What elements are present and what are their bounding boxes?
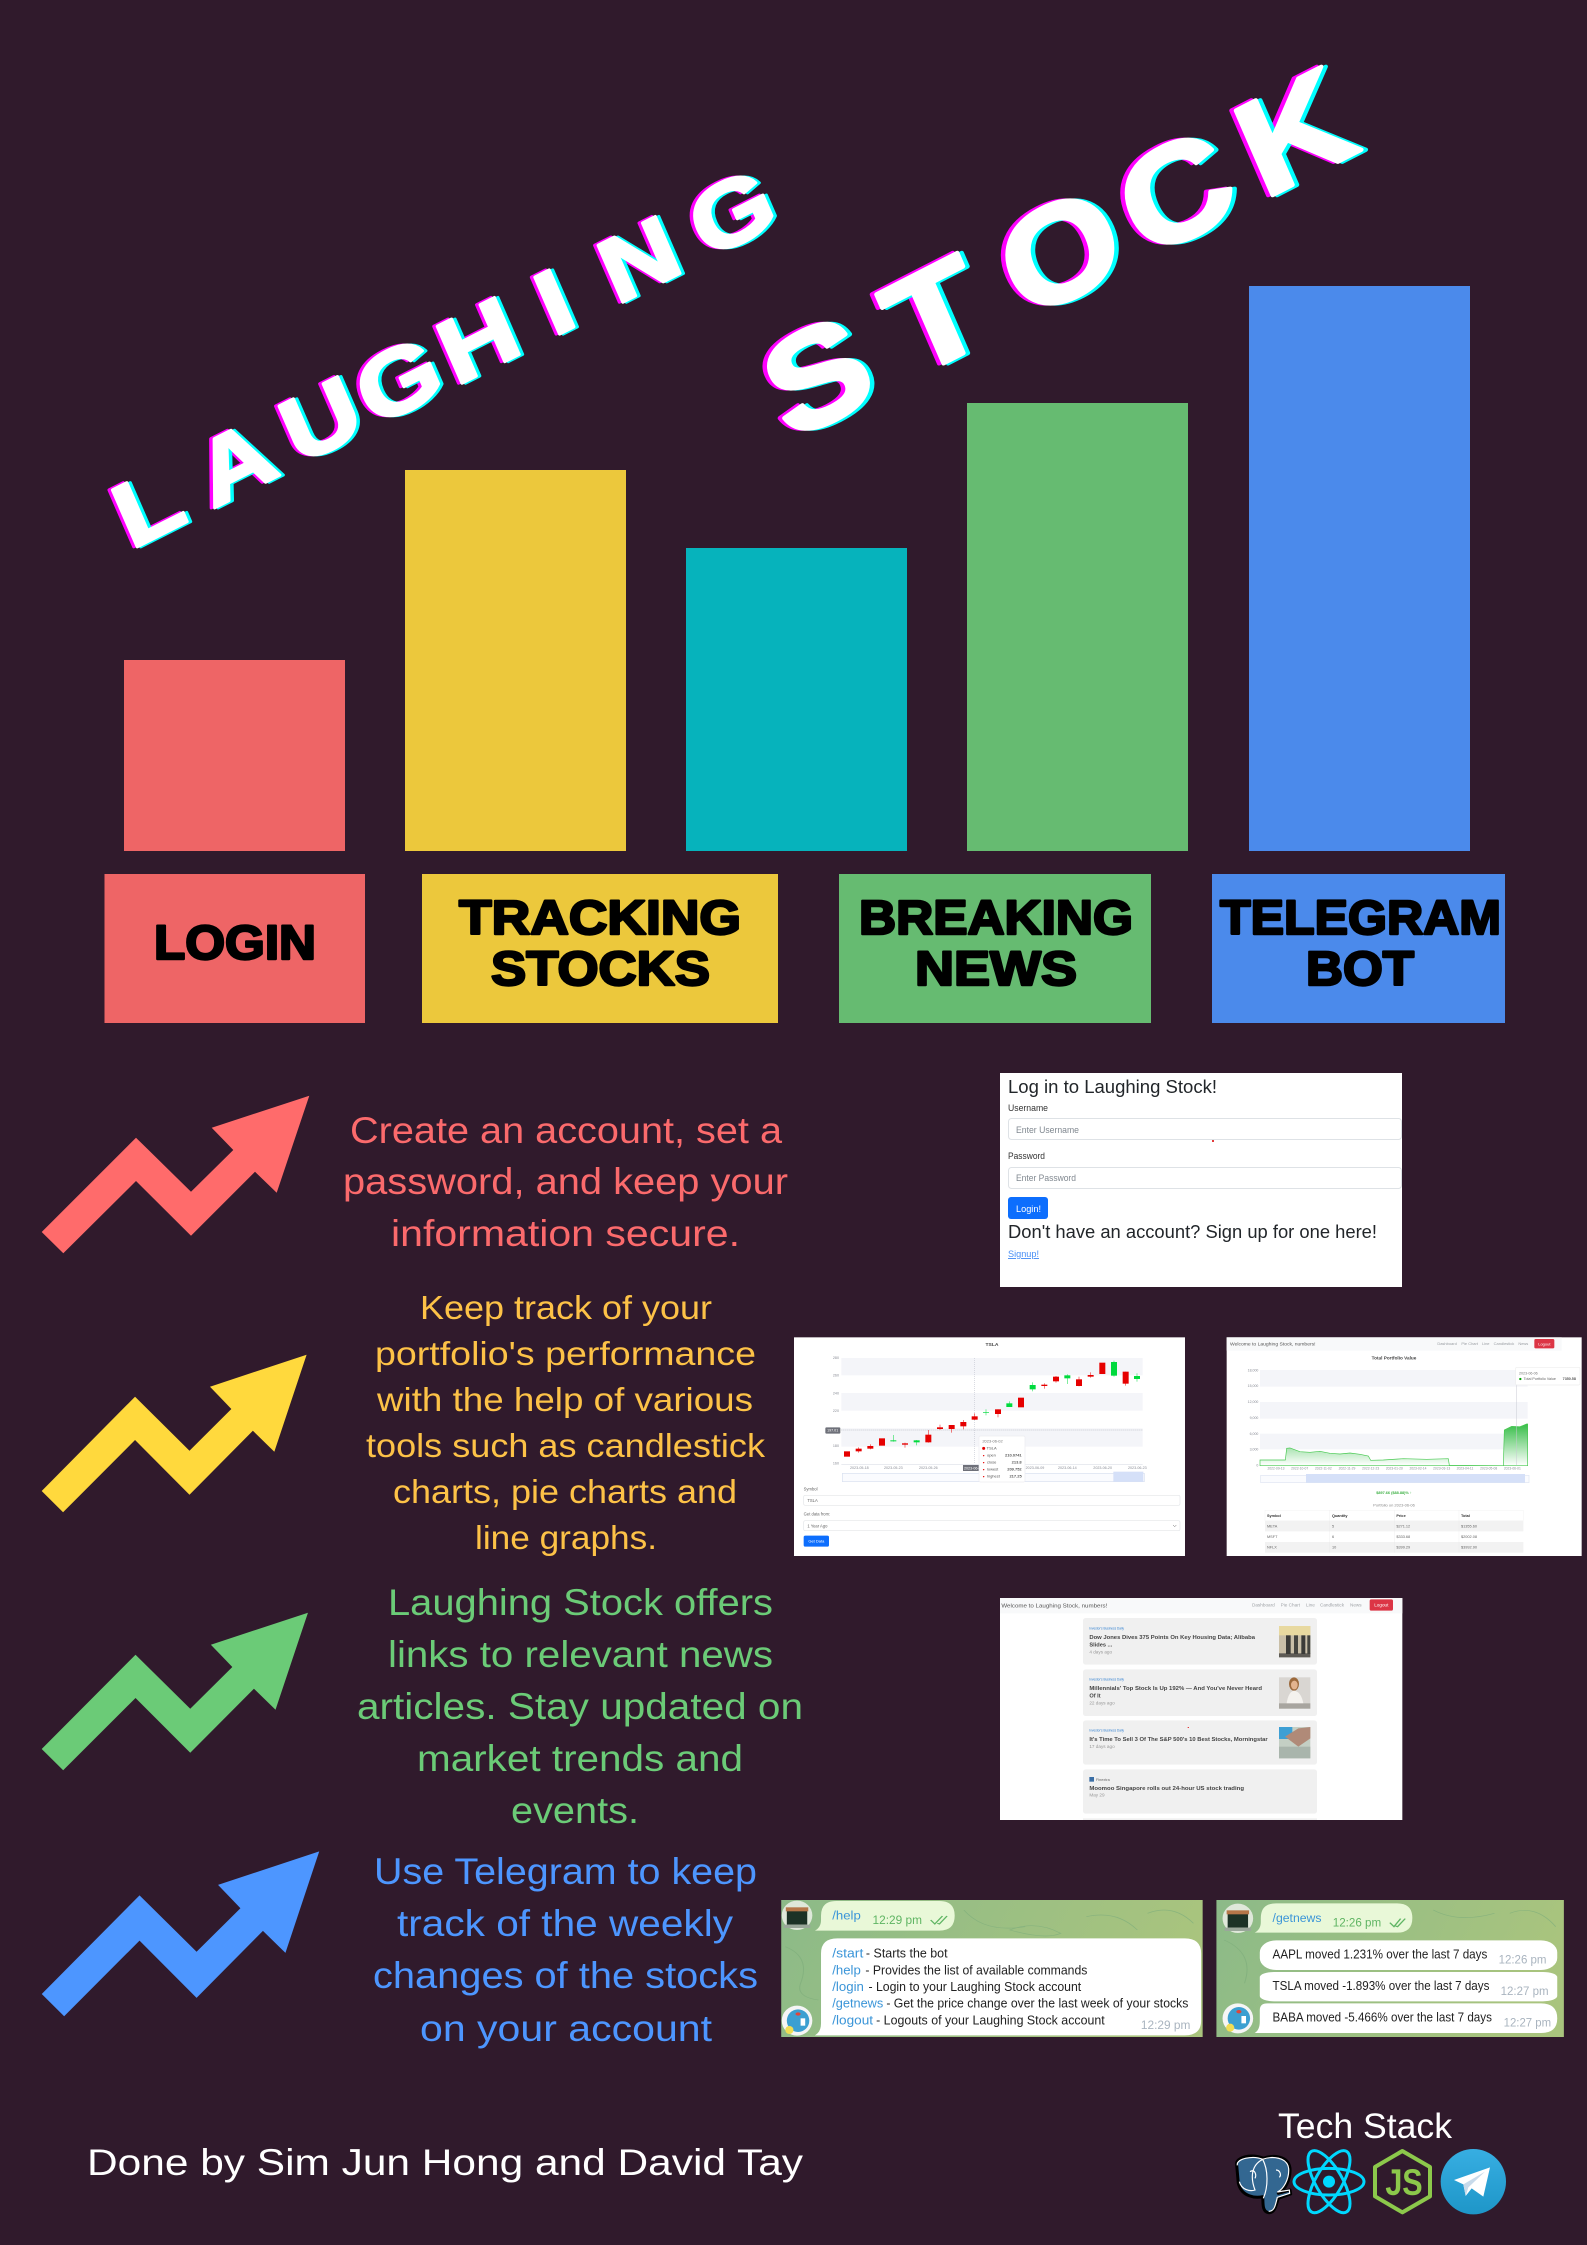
- bubble: /getnews command: [1255, 1903, 1412, 1933]
- icon: react: [1294, 2145, 1364, 2219]
- screenshot: candlestick chart: 260: [833, 1374, 839, 1378]
- text: tracking description: line graphs.: [475, 1520, 657, 1557]
- icon: red trend arrow: [42, 1096, 309, 1253]
- news navbar: Welcome to Laughing Stock, numbers!: [1001, 1603, 1108, 1609]
- portfolio area chart: [1260, 1424, 1528, 1466]
- chart tooltip: highest: [987, 1474, 1001, 1479]
- candlesticks: [844, 1361, 1140, 1457]
- portfolio tooltip: 2023-06-06: [1519, 1371, 1538, 1375]
- portfolio tooltip: 7350.58: [1563, 1377, 1576, 1381]
- credits: Done by Sim Jun Hong and David Tay: [87, 2141, 803, 2183]
- screenshot: portfolio line chart: 2022-12-23: [1362, 1467, 1379, 1471]
- dashboard navbar: Logout: [1538, 1341, 1551, 1346]
- screenshot: candlestick chart: 240: [833, 1391, 839, 1395]
- text: telegram description: track of the weekly: [397, 1903, 734, 1944]
- text: news description: articles. Stay updated on: [357, 1686, 803, 1727]
- icon: telegram: [1441, 2149, 1506, 2214]
- text: telegram description: [373, 1851, 758, 2049]
- label: telegram bot: TELEGRAM: [1220, 892, 1501, 945]
- portfolio tooltip: [1516, 1367, 1580, 1385]
- screenshot: candlestick chart: [794, 1337, 1185, 1556]
- news card 4: May 29: [1089, 1793, 1105, 1798]
- text: telegram description: changes of the stocks: [373, 1955, 758, 1996]
- title word: laughing: LAUGHING: [102, 148, 793, 568]
- news image: woman with phone: [1279, 1677, 1310, 1709]
- news navbar: Pie Chart: [1281, 1603, 1301, 1608]
- symbol form: TSLA: [807, 1498, 818, 1503]
- holdings table: Symbol: [1267, 1514, 1281, 1518]
- avatar: bot: [782, 2006, 812, 2036]
- label: breaking news: [839, 874, 1151, 1023]
- dashboard navbar: News: [1518, 1341, 1528, 1346]
- symbol form: [804, 1487, 1180, 1547]
- bubble: command list: /logout: [832, 2013, 873, 2027]
- news card 1: 4 days ago: [1089, 1649, 1113, 1654]
- bubble: BABA move: [1255, 2003, 1557, 2033]
- screenshot: candlestick chart: 2023-06-09: [1026, 1466, 1044, 1470]
- screenshot: portfolio line chart: 2023-01-20: [1386, 1467, 1403, 1471]
- label: tracking stocks: [422, 874, 778, 1023]
- tech stack icons: [1237, 2145, 1506, 2219]
- screenshot: portfolio line chart: 2022-11-29: [1339, 1467, 1356, 1471]
- label: tracking stocks: STOCKS: [491, 943, 710, 996]
- bubble: /help command: [815, 1901, 955, 1931]
- screenshot: candlestick chart: 2023-05-18: [850, 1466, 869, 1470]
- screenshot: portfolio line chart: 0: [1256, 1464, 1258, 1468]
- news card 3: 17 days ago: [1089, 1744, 1115, 1749]
- bubble: /help command: /help: [832, 1909, 861, 1922]
- screenshot: login form: Enter Username: [1016, 1125, 1079, 1136]
- news navbar: Dashboard: [1252, 1603, 1275, 1608]
- news navbar: Logout: [1374, 1603, 1389, 1608]
- avatar: bot: [1223, 2003, 1253, 2033]
- screenshot: portfolio line chart: 2023-04-11: [1457, 1467, 1474, 1471]
- chart tooltip: lowest: [987, 1467, 999, 1472]
- label: telegram bot: BOT: [1306, 943, 1414, 996]
- screenshot: candlestick chart: 2023-06-02: [964, 1466, 983, 1470]
- screenshot: portfolio line chart: Total Portfolio Value: [1372, 1356, 1417, 1361]
- bubble: command list: /getnews: [832, 1996, 883, 2011]
- login button: Login!: [1016, 1204, 1041, 1215]
- title word: laughing: LAUGHING: [95, 148, 786, 568]
- news navbar: Line: [1306, 1603, 1315, 1608]
- screenshot: candlestick chart: 180: [833, 1444, 839, 1448]
- holdings table: $1355.60: [1461, 1524, 1477, 1528]
- screenshot: portfolio line chart: 2022-09-13: [1267, 1467, 1285, 1471]
- dashboard navbar: Dashboard: [1437, 1341, 1457, 1346]
- label: breaking news: NEWS: [915, 943, 1077, 996]
- news card 4: Moomoo Singapore rolls out 24-hour US stock trading: [1089, 1786, 1245, 1792]
- screenshot: portfolio line chart: 2023-02-14: [1409, 1467, 1427, 1471]
- news card 3: It's Time To Sell 3 Of The S&P 500's 10 Best Stocks, Morningstar: [1089, 1737, 1268, 1743]
- text: tracking description: with the help of various: [376, 1382, 753, 1419]
- screenshot: news feed: [1000, 1598, 1402, 1820]
- title: [95, 37, 1379, 568]
- chart tooltip: 213.8: [1012, 1460, 1022, 1465]
- holdings table: NFLX: [1267, 1545, 1277, 1549]
- login button: [1008, 1197, 1048, 1219]
- label: tracking stocks: TRACKING: [459, 892, 741, 945]
- feature labels: [104, 874, 1505, 1023]
- news card 2: Of It: [1089, 1694, 1101, 1700]
- holdings table: $333.68: [1396, 1535, 1410, 1539]
- icon: green trend arrow: [42, 1613, 308, 1770]
- holdings table: Price: [1396, 1514, 1406, 1518]
- text: news description: Laughing Stock offers: [388, 1582, 773, 1623]
- text: news description: links to relevant news: [388, 1634, 773, 1675]
- icon: blue trend arrow: [42, 1851, 319, 2016]
- screenshot: telegram help chat: [781, 1900, 1203, 2037]
- screenshot: telegram getnews chat: [1216, 1900, 1564, 2037]
- news card 2: Investor's Business Daily: [1089, 1678, 1124, 1682]
- portfolio tooltip: Total Portfolio Value: [1524, 1377, 1556, 1381]
- screenshot: login form: Signup!: [1008, 1249, 1039, 1260]
- icon: node js: JS: [1385, 2161, 1423, 2203]
- bubble: command list: [815, 1938, 1201, 2035]
- bar: teal: [686, 548, 907, 851]
- login heading: Log in to Laughing Stock!: [1008, 1076, 1217, 1097]
- holdings table: MSFT: [1267, 1535, 1278, 1539]
- dashboard navbar: Pie Chart: [1461, 1341, 1479, 1346]
- bubble: /help command: 12:29 pm: [873, 1914, 922, 1927]
- screenshot: candlestick chart: 160: [833, 1462, 839, 1466]
- news navbar: News: [1350, 1603, 1362, 1608]
- bar: tracking stocks: [405, 470, 626, 851]
- text: login description: Create an account, set a: [350, 1110, 782, 1151]
- holdings table: $3992.90: [1461, 1545, 1477, 1549]
- text: tracking description: Keep track of your: [420, 1290, 712, 1327]
- symbol form: 1 Year Ago: [807, 1523, 828, 1528]
- bubble: BABA move: 12:27 pm: [1504, 2016, 1551, 2029]
- screenshot: portfolio line chart: 2023-05-08: [1480, 1467, 1497, 1471]
- news card 3: Investor's Business Daily: [1089, 1729, 1124, 1733]
- bar: login: [124, 660, 345, 851]
- text: login description: password, and keep your: [343, 1161, 788, 1202]
- holdings table: 5: [1332, 1524, 1334, 1528]
- news card 4: [1083, 1769, 1317, 1814]
- screenshot: portfolio line chart: 12,000: [1248, 1400, 1258, 1404]
- bubble: AAPL move: 12:26 pm: [1499, 1953, 1547, 1966]
- label: login: LOGIN: [154, 917, 316, 970]
- symbol form: Get Data: [808, 1539, 825, 1544]
- news card 2: Millennials' Top Stock Is Up 192% — And You've Never Heard: [1089, 1686, 1263, 1692]
- chart tooltip: 209.752: [1007, 1467, 1022, 1472]
- news card 3: [1083, 1720, 1317, 1765]
- screenshot: portfolio line chart: 18,000: [1248, 1368, 1258, 1372]
- bubble: command list: - Login to your Laughing Stock account: [868, 1979, 1081, 1994]
- news card 1: [1083, 1618, 1317, 1665]
- bubble: /getnews command: /getnews: [1273, 1912, 1322, 1925]
- news card 2: 22 days ago: [1089, 1701, 1115, 1706]
- holdings table: [1265, 1510, 1523, 1553]
- chart tooltip: 210.0741: [1005, 1453, 1022, 1458]
- bubble: command list: - Starts the bot: [866, 1946, 948, 1961]
- screenshot: portfolio line chart: 2023-03-13: [1433, 1467, 1450, 1471]
- bubble: command list: - Provides the list of available commands: [865, 1963, 1087, 1977]
- screenshot: candlestick chart: 2023-05-26: [919, 1466, 938, 1470]
- text: login description: [343, 1110, 788, 1254]
- news card 1: Dow Jones Dives 375 Points On Key Housing Data; Alibaba: [1089, 1635, 1256, 1641]
- screenshot: portfolio line chart: Portfolio on 2023-06-06: [1373, 1502, 1416, 1507]
- holdings table: 6: [1332, 1535, 1334, 1539]
- bubble: TSLA move: 12:27 pm: [1501, 1985, 1549, 1998]
- bubble: TSLA move: [1260, 1972, 1557, 2001]
- label: login: [104, 874, 365, 1023]
- news card 1: Slides ...: [1089, 1643, 1113, 1649]
- screenshot: login form: Password: [1008, 1151, 1045, 1162]
- screenshot: login form: [1000, 1073, 1402, 1287]
- title word: laughing: LAUGHING: [99, 148, 790, 568]
- text: login description: information secure.: [391, 1213, 740, 1254]
- chart tooltip: 2023-06-02: [982, 1439, 1003, 1444]
- screenshot: candlestick chart: 220: [833, 1409, 839, 1413]
- screenshot: login form: Don't have an account? Sign up for one here!: [1008, 1221, 1377, 1242]
- holdings table: $399.29: [1396, 1545, 1410, 1549]
- screenshot: portfolio line chart: $897.66 ($88.88)% ↑: [1376, 1491, 1412, 1495]
- chart tooltip: TSLA: [987, 1446, 997, 1451]
- bar chart: [124, 286, 1470, 851]
- screenshot: candlestick chart: 197.01: [827, 1429, 838, 1433]
- holdings table: $2002.08: [1461, 1535, 1477, 1539]
- holdings table: Total: [1461, 1514, 1470, 1518]
- label: telegram bot: [1212, 874, 1505, 1023]
- holdings table: META: [1267, 1524, 1278, 1528]
- screenshot: candlestick chart: 2023-06-20: [1093, 1466, 1112, 1470]
- chart tooltip: 217.25: [1009, 1474, 1022, 1479]
- screenshot: candlestick chart: TSLA: [985, 1342, 999, 1348]
- bubble: command list: /help: [832, 1963, 861, 1977]
- label: breaking news: BREAKING: [859, 892, 1133, 945]
- screenshot: portfolio line chart: 2022-11-02: [1315, 1467, 1332, 1471]
- holdings table: $271.12: [1396, 1524, 1410, 1528]
- screenshot: candlestick chart: 280: [833, 1356, 839, 1360]
- screenshot: login form: Username: [1008, 1103, 1048, 1114]
- news card 4: Finextra: [1096, 1778, 1111, 1782]
- bubble: /getnews command: 12:26 pm: [1333, 1917, 1381, 1930]
- icon: node js: [1375, 2151, 1430, 2212]
- bubble: command list: - Logouts of your Laughing Stock account: [876, 2013, 1105, 2027]
- news card 2: [1083, 1669, 1317, 1716]
- icon: postgresql: [1237, 2156, 1291, 2213]
- bubble: command list: /start: [832, 1946, 864, 1961]
- dashboard navbar: [1227, 1337, 1562, 1351]
- avatar: bus stop: [782, 1901, 812, 1930]
- chart tooltip: open: [987, 1453, 996, 1458]
- bar: telegram bot: [1249, 286, 1470, 851]
- news navbar: Candlestick: [1320, 1603, 1345, 1608]
- text: news description: [357, 1582, 803, 1831]
- symbol form: Get data from:: [804, 1512, 830, 1517]
- bubble: AAPL move: [1260, 1940, 1557, 1970]
- text: tracking description: [366, 1290, 765, 1557]
- bubble: command list: - Get the price change over the last week of your stocks: [886, 1996, 1188, 2011]
- news navbar: [1000, 1598, 1402, 1613]
- chart tooltip: close: [987, 1460, 997, 1465]
- text: tracking description: charts, pie charts and: [393, 1474, 737, 1511]
- screenshot: candlestick chart: 2023-05-23: [884, 1466, 903, 1470]
- screenshot: portfolio line chart: 3,000: [1250, 1448, 1258, 1452]
- holdings table: 10: [1332, 1545, 1336, 1549]
- chart tooltip: [979, 1436, 1025, 1482]
- screenshot: portfolio line chart: [1227, 1337, 1582, 1556]
- text: tracking description: tools such as candlestick: [366, 1428, 765, 1465]
- screenshot: portfolio line chart: 2022-10-07: [1291, 1467, 1308, 1471]
- icon: yellow trend arrow: [42, 1355, 307, 1512]
- screenshot: portfolio line chart: 15,000: [1248, 1384, 1258, 1388]
- title word: stock: STOCK: [746, 37, 1379, 468]
- news card 1: Investor's Business Daily: [1089, 1627, 1124, 1631]
- avatar: bus stop: [1223, 1904, 1253, 1933]
- news image: exchange building: [1279, 1626, 1310, 1657]
- symbol form: Symbol: [804, 1487, 818, 1492]
- holdings table: Quantity: [1332, 1514, 1348, 1518]
- screenshot: portfolio line chart: 2023-06-01: [1504, 1467, 1521, 1471]
- screenshot: candlestick chart: 2023-06-23: [1128, 1466, 1147, 1470]
- bubble: command list: 12:29 pm: [1141, 2019, 1190, 2032]
- bubble: command list: /login: [832, 1979, 864, 1994]
- text: news description: events.: [511, 1790, 639, 1831]
- title word: stock: STOCK: [741, 37, 1374, 468]
- screenshot: portfolio line chart: 6,000: [1250, 1432, 1258, 1436]
- screenshot: candlestick chart: 2023-06-14: [1058, 1466, 1077, 1470]
- tech stack heading: Tech Stack: [1278, 2107, 1452, 2146]
- text: telegram description: Use Telegram to keep: [374, 1851, 757, 1892]
- text: tracking description: portfolio's performance: [375, 1336, 756, 1373]
- dashboard navbar: Welcome to Laughing Stock, numbers!: [1230, 1342, 1316, 1348]
- dashboard navbar: Line: [1482, 1341, 1490, 1346]
- title word: stock: STOCK: [737, 37, 1370, 468]
- news image: money: [1279, 1727, 1310, 1758]
- text: news description: market trends and: [417, 1738, 743, 1779]
- screenshot: login form: Enter Password: [1016, 1173, 1076, 1184]
- dashboard navbar: Candlestick: [1494, 1341, 1514, 1346]
- screenshot: portfolio line chart: 9,000: [1250, 1416, 1258, 1420]
- bar: breaking news: [967, 403, 1188, 851]
- text: telegram description: on your account: [420, 2008, 713, 2049]
